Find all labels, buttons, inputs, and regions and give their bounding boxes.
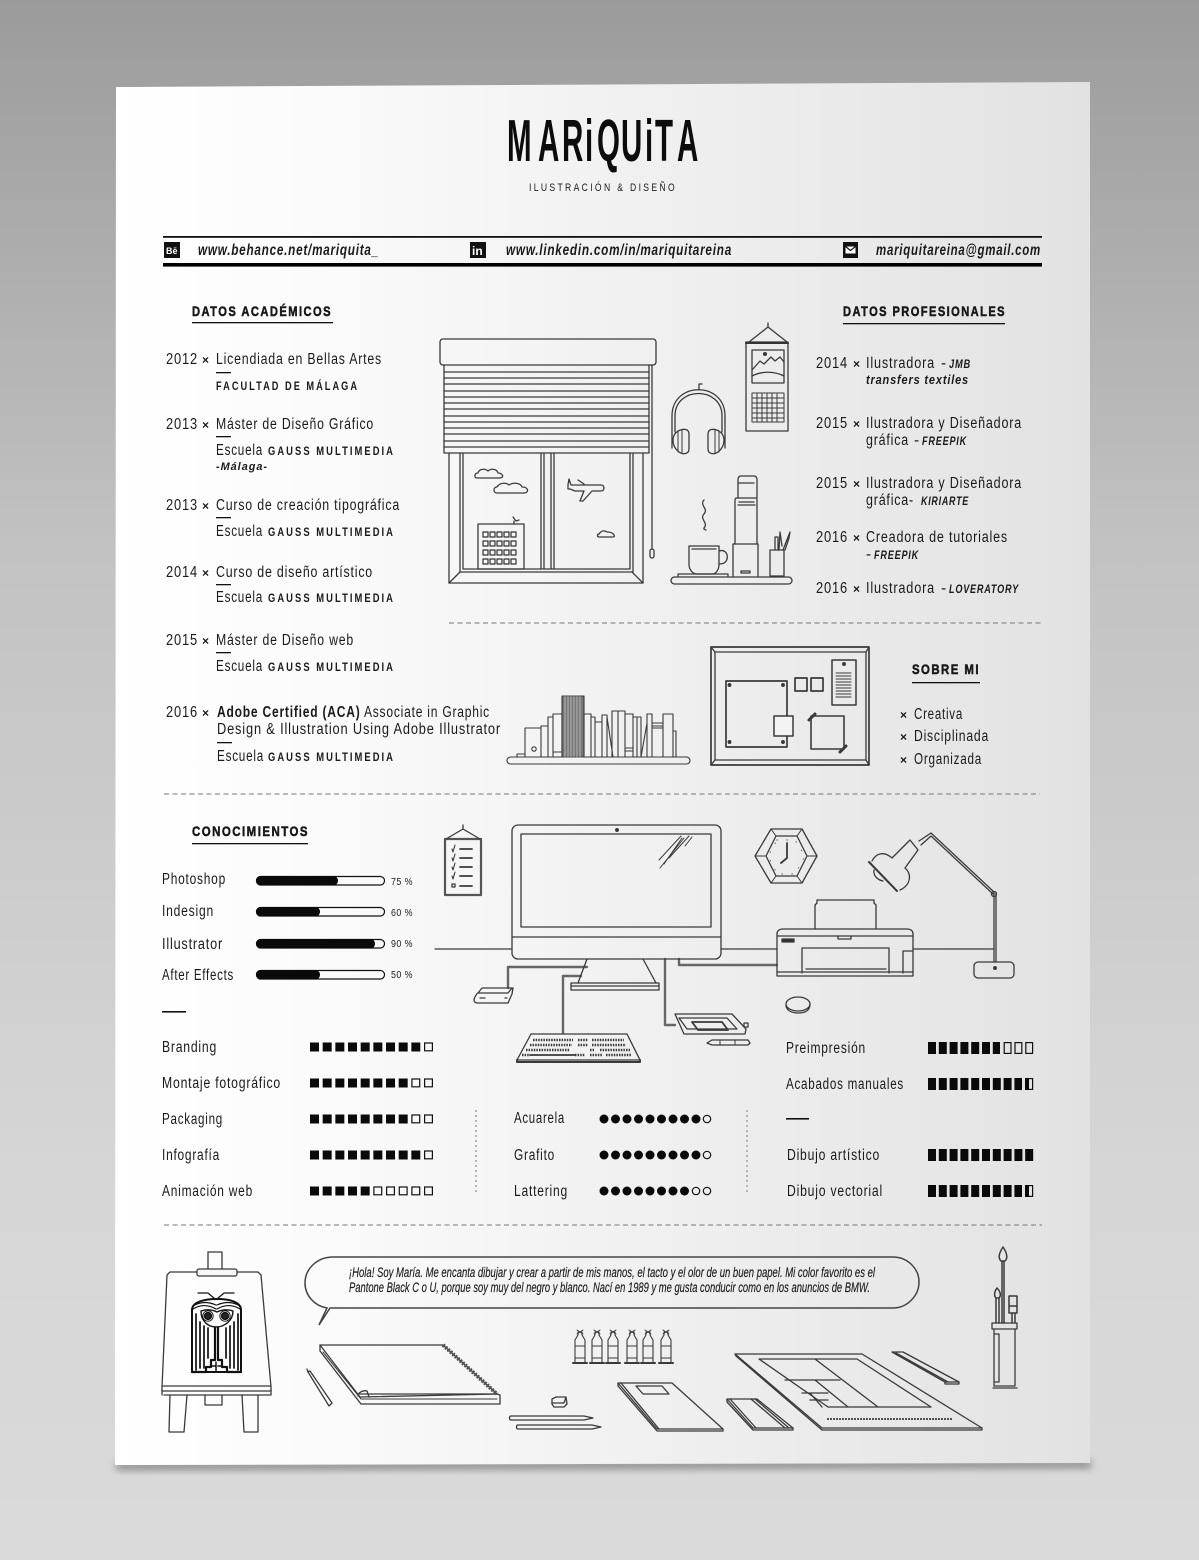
illustration: window with blind	[440, 339, 656, 583]
cloud	[494, 483, 528, 493]
checklist	[445, 825, 481, 895]
rating: preimpresion	[786, 1040, 1033, 1057]
entry 2016: Escuela	[217, 748, 264, 765]
linkedin link: www.linkedin.com/in/mariquitareina	[506, 242, 732, 259]
job 2016 loveratory	[816, 580, 1019, 597]
entry 2013 master: GAUSS MULTIMEDIA	[268, 446, 395, 458]
saucer	[678, 574, 728, 576]
illustration: shelf with mug, blender and pens	[671, 476, 792, 584]
entry 2012	[166, 351, 382, 393]
heading: SOBRE MI	[912, 661, 980, 677]
entry 2013 master: 2013	[166, 416, 198, 433]
rating: animacion web	[162, 1183, 432, 1200]
rating: dibujo vectorial	[787, 1183, 1033, 1200]
rating: acabados manuales: Acabados manuales	[786, 1076, 904, 1093]
entry 2013 master: Máster de Diseño Gráfico	[216, 416, 374, 433]
icon: pencil	[307, 1369, 332, 1406]
illustration: sketchbook	[320, 1345, 500, 1404]
router	[474, 988, 513, 1003]
entry 2013 curso: Curso de creación tipográfica	[216, 497, 400, 514]
job 2016 tutoriales: ×	[853, 531, 860, 545]
icon: eraser	[552, 1397, 567, 1407]
entry 2015	[166, 632, 395, 675]
callout: speech bubble: Pantone Black C o U, porque soy muy del negro y blanco. Nací en 1989 y me gusta conducir como en los anuncios de BMW.	[349, 1280, 870, 1295]
tablet	[675, 1014, 748, 1034]
job 2016 tutoriales: Creadora de tutoriales	[866, 529, 1008, 546]
icon: pencils	[510, 1416, 601, 1429]
trait: ×	[900, 753, 907, 767]
job 2015 kiriarte: ×	[853, 477, 860, 491]
notebook	[727, 1399, 793, 1430]
entry 2013 master	[166, 416, 395, 473]
job 2014: -	[941, 355, 947, 372]
skill bar: indesign: 60 %	[391, 908, 413, 919]
cloud	[475, 469, 503, 478]
skill bar: illustrator	[162, 936, 413, 953]
trait: Creativa	[914, 706, 963, 723]
rating: lattering: Lattering	[514, 1183, 568, 1200]
job 2014: JMB	[949, 359, 971, 371]
job 2014: transfers textiles	[866, 372, 969, 387]
entry 2013 curso: GAUSS MULTIMEDIA	[268, 527, 395, 539]
rating: acuarela	[514, 1110, 711, 1127]
callout: speech bubble	[305, 1257, 919, 1325]
lamp	[869, 833, 1014, 978]
airplane	[568, 479, 604, 501]
panel: paper sheet	[115, 82, 1090, 1465]
job 2016 loveratory: ×	[853, 582, 860, 596]
job 2016 tutoriales: -	[866, 546, 872, 563]
job 2014: ×	[853, 357, 860, 371]
job 2016 tutoriales	[816, 529, 1008, 563]
entry 2014: Curso de diseño artístico	[216, 564, 373, 581]
entry 2014: 2014	[166, 564, 198, 581]
rating: dibujo artistico: Dibujo artístico	[787, 1147, 880, 1164]
job 2015 freepik	[816, 415, 1022, 449]
panel: sobre mi	[900, 661, 989, 768]
entry 2016: Design & Illustration Using Adobe Illustrator	[217, 721, 501, 738]
entry 2015: GAUSS MULTIMEDIA	[268, 662, 395, 674]
entry 2012: ×	[202, 353, 209, 367]
job 2016 loveratory: 2016	[816, 580, 848, 597]
entry 2015: 2015	[166, 632, 198, 649]
trait: ×	[900, 730, 907, 744]
ruler	[892, 1352, 959, 1384]
trait: ×	[900, 708, 907, 722]
skill bar: photoshop: Photoshop	[162, 871, 226, 888]
job 2016 tutoriales: FREEPIK	[874, 550, 919, 562]
job 2016 loveratory: -	[941, 580, 947, 597]
job 2015 freepik: -	[914, 432, 920, 449]
job 2015 kiriarte: Ilustradora y Diseñadora	[866, 475, 1022, 492]
trait: Organizada	[914, 751, 982, 768]
icon: mail	[843, 242, 858, 258]
entry 2016: Adobe Certified (ACA) Associate in Graphic	[217, 704, 490, 721]
job 2015 kiriarte: gráfica-	[866, 492, 914, 509]
illustration: easel with portrait	[162, 1252, 271, 1432]
rating: montaje fotografico	[162, 1075, 432, 1092]
entry 2014	[166, 564, 395, 606]
entry 2014: GAUSS MULTIMEDIA	[268, 593, 395, 605]
entry 2014: Escuela	[216, 589, 263, 606]
hatched book	[562, 696, 584, 757]
entry 2015: Máster de Diseño web	[216, 632, 354, 649]
job 2015 freepik: Ilustradora y Diseñadora	[866, 415, 1022, 432]
email link: mariquitareina@gmail.com	[876, 242, 1041, 259]
job 2015 freepik: ×	[853, 417, 860, 431]
skill bar: photoshop	[162, 871, 413, 888]
entry 2013 curso	[166, 497, 400, 540]
job 2015 kiriarte: KIRIARTE	[921, 496, 969, 508]
job 2015 kiriarte	[816, 475, 1022, 509]
trait	[900, 728, 989, 745]
entry 2016: GAUSS MULTIMEDIA	[268, 752, 395, 764]
illustration: pin board	[711, 647, 869, 765]
job 2015 freepik: gráfica	[866, 432, 909, 449]
skill bar: after effects: 50 %	[391, 970, 413, 981]
folder	[618, 1383, 723, 1431]
rating: preimpresion: Preimpresión	[786, 1040, 866, 1057]
rating: branding	[162, 1039, 432, 1056]
monitor	[512, 825, 721, 990]
rating: acabados manuales	[786, 1076, 1033, 1093]
panel: conocimientos	[162, 823, 413, 1013]
job 2016 tutoriales: 2016	[816, 529, 848, 546]
building	[478, 517, 524, 569]
job 2014	[816, 355, 971, 387]
divider	[164, 793, 1040, 795]
trait: Disciplinada	[914, 728, 989, 745]
divider	[449, 622, 1043, 624]
rating: infografia	[162, 1147, 432, 1164]
trait	[900, 751, 982, 768]
skill bar: indesign	[162, 903, 413, 920]
entry 2012: 2012	[166, 351, 198, 368]
heading	[192, 823, 309, 844]
skill bar: indesign: Indesign	[162, 903, 214, 920]
trait	[900, 706, 963, 723]
icon: linkedin: in	[472, 244, 483, 258]
rating: infografia: Infografía	[162, 1147, 220, 1164]
layout sheet	[735, 1354, 982, 1430]
rating: grafito: Grafito	[514, 1147, 555, 1164]
job 2016 loveratory: Ilustradora	[866, 580, 935, 597]
entry 2012: FACULTAD DE MÁLAGA	[216, 380, 359, 393]
printer	[777, 900, 913, 976]
pen cup	[770, 532, 790, 576]
rating: animacion web: Animación web	[162, 1183, 253, 1200]
keyboard	[517, 1034, 640, 1062]
desk line	[435, 948, 994, 950]
rating: packaging: Packaging	[162, 1111, 223, 1128]
job 2016 loveratory: LOVERATORY	[949, 584, 1019, 596]
skill bar: illustrator: 90 %	[391, 939, 413, 950]
skill bar: photoshop: 75 %	[391, 877, 413, 888]
rating: branding: Branding	[162, 1039, 217, 1056]
blender	[733, 476, 758, 576]
panel: datos academicos	[166, 303, 501, 765]
illustration: bookshelf	[507, 696, 690, 764]
job 2015 kiriarte: 2015	[816, 475, 848, 492]
stylus	[707, 1040, 750, 1045]
entry 2016	[166, 704, 501, 765]
entry 2015: ×	[202, 634, 209, 648]
cables	[508, 959, 777, 1033]
heading: DATOS ACADÉMICOS	[192, 303, 332, 319]
rating: grafito	[514, 1147, 711, 1164]
skill bar: after effects	[162, 967, 413, 984]
skill bar: after effects: After Effects	[162, 967, 234, 984]
entry 2013 master: ×	[202, 418, 209, 432]
illustration: desk	[435, 825, 1014, 1062]
title: Mariquita logo: MARiQUiTA	[507, 108, 698, 174]
panel: datos profesionales	[816, 303, 1022, 597]
puck	[786, 997, 810, 1013]
subtitle: ILUSTRACIÓN & DISEÑO	[529, 181, 677, 194]
clock	[755, 829, 817, 883]
rating: acuarela: Acuarela	[514, 1110, 565, 1127]
entry 2013 curso: ×	[202, 499, 209, 513]
steam	[703, 500, 706, 530]
brushes in holder	[992, 1247, 1017, 1388]
paint tubes	[573, 1330, 673, 1363]
behance link: www.behance.net/mariquita_	[198, 242, 379, 259]
cloud	[598, 531, 614, 537]
contact bar	[163, 236, 1042, 267]
entry 2013 curso: Escuela	[216, 523, 263, 540]
entry 2014: ×	[202, 566, 209, 580]
job 2014: Ilustradora	[866, 355, 935, 372]
entry 2016: 2016	[166, 704, 198, 721]
rating: montaje fotografico: Montaje fotográfico	[162, 1075, 281, 1092]
rating: packaging	[162, 1111, 432, 1128]
skill bar: illustrator: Illustrator	[162, 936, 223, 953]
portrait	[192, 1293, 241, 1372]
icon: headphones	[672, 384, 725, 454]
icon: hanging calendar	[746, 323, 788, 431]
rating: lattering	[514, 1183, 711, 1200]
entry 2013 curso: 2013	[166, 497, 198, 514]
mug	[689, 546, 727, 574]
entry 2013 master: Escuela	[216, 442, 263, 459]
entry 2016: ×	[202, 706, 209, 720]
job 2015 freepik: 2015	[816, 415, 848, 432]
heading: DATOS PROFESIONALES	[843, 303, 1006, 319]
job 2014: 2014	[816, 355, 848, 372]
divider	[164, 1224, 1042, 1226]
heading: CONOCIMIENTOS	[192, 823, 309, 839]
job 2015 freepik: FREEPIK	[922, 436, 967, 448]
entry 2013 master: -Málaga-	[216, 461, 268, 473]
entry 2015: Escuela	[216, 658, 263, 675]
callout: speech bubble: ¡Hola! Soy María. Me encanta dibujar y crear a partir de mis manos, el tacto y el olor de un buen papel. Mi color favorito es el	[349, 1265, 876, 1280]
entry 2012: Licendiada en Bellas Artes	[216, 351, 382, 368]
icon: behance: Bē	[166, 246, 178, 256]
icon: behance	[164, 242, 180, 258]
rating: dibujo vectorial: Dibujo vectorial	[787, 1183, 883, 1200]
icon: linkedin	[470, 242, 486, 258]
